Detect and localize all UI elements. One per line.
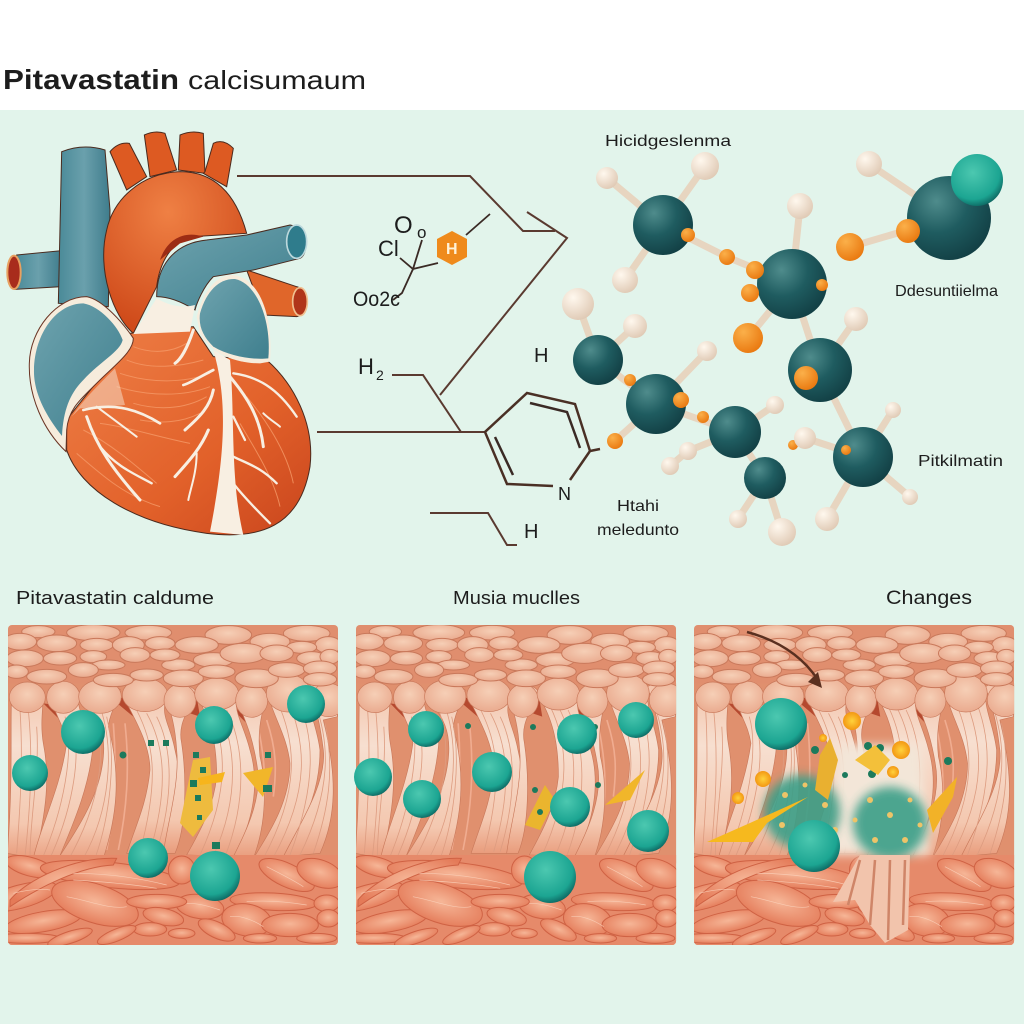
flames	[707, 797, 808, 842]
molecule: atoms	[562, 151, 1003, 546]
molecule labels: Htahi	[617, 498, 659, 515]
panel: muscle tissue 3	[667, 625, 1024, 955]
panel: muscle tissue 2	[329, 625, 688, 955]
title	[3, 64, 366, 95]
atria	[29, 297, 133, 452]
pyridine ring	[485, 393, 600, 504]
atom labels	[358, 345, 548, 543]
atom labels: H	[524, 521, 538, 543]
molecule labels: Ddesuntiielma	[895, 283, 998, 300]
icon: anatomical heart	[7, 132, 311, 535]
chemical formula fragment: Oo2c	[353, 288, 400, 311]
connector lines	[237, 176, 567, 545]
panel headings: Pitavastatin caldume	[16, 588, 214, 608]
title: calcisumaum	[188, 65, 366, 95]
chemical formula fragment	[353, 212, 490, 311]
coronary vessels	[133, 298, 195, 334]
atom labels: 2	[376, 367, 384, 383]
molecule labels: meledunto	[597, 522, 679, 539]
pyridine ring: N	[558, 484, 571, 504]
panel headings	[16, 588, 972, 609]
strand bundle	[833, 855, 910, 943]
molecule: bonds	[578, 164, 949, 532]
molecule labels	[597, 133, 1003, 539]
chemical formula fragment: O	[394, 212, 413, 239]
chemical formula fragment: H	[446, 241, 458, 258]
chemical formula fragment: o	[417, 223, 426, 242]
chemical formula fragment: Cl	[378, 236, 399, 261]
molecule labels: Pitkilmatin	[918, 453, 1003, 470]
atom labels: H	[358, 354, 374, 379]
panel: muscle tissue 1	[0, 625, 350, 955]
molecule labels: Hicidgeslenma	[605, 133, 731, 150]
atom labels: H	[534, 345, 548, 367]
muscle striations	[77, 343, 293, 507]
panel headings: Musia muclles	[453, 588, 580, 608]
panel headings: Changes	[886, 588, 972, 609]
title: Pitavastatin	[3, 64, 179, 95]
arrow	[747, 632, 822, 688]
